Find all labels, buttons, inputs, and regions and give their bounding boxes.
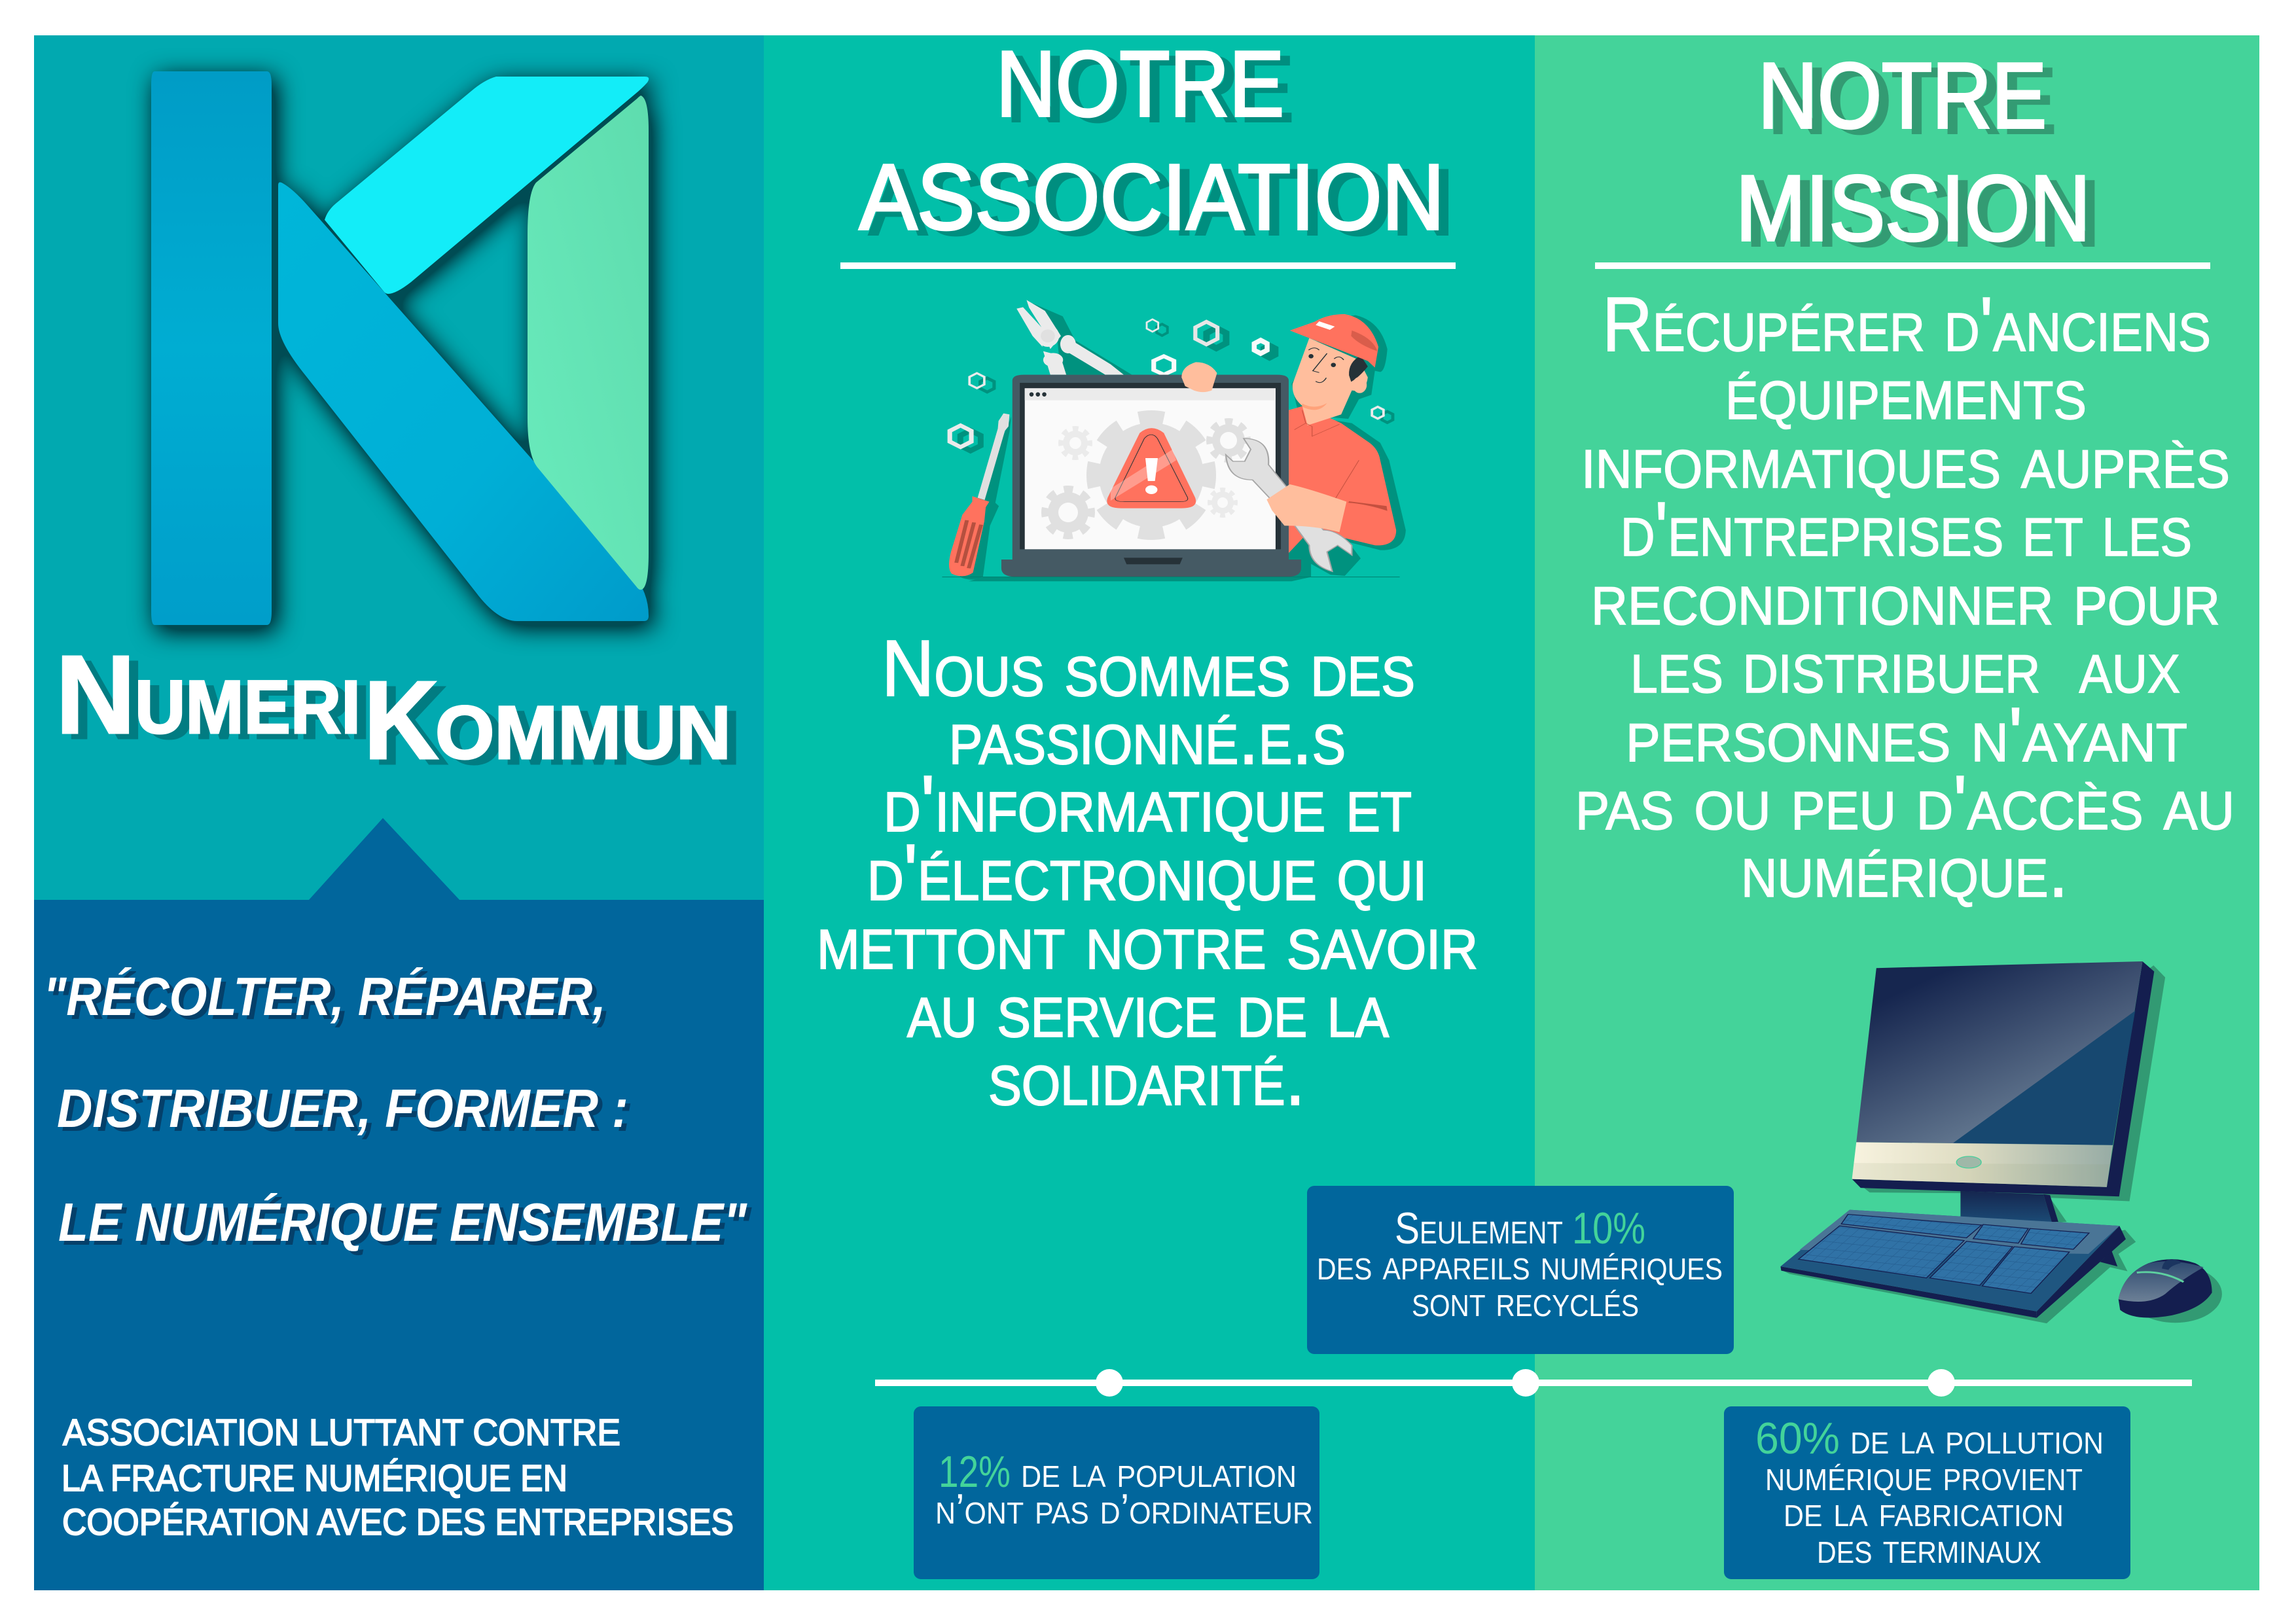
timeline (875, 1369, 2192, 1397)
brand name: OMMUN (435, 691, 731, 775)
illustration: desktop computer (1780, 961, 2222, 1323)
association paragraph: Nous sommes des (882, 624, 1415, 713)
association description: ASSOCIATION LUTTANT CONTRE (63, 1412, 620, 1454)
icon: sleeve cuff (1348, 501, 1388, 511)
icon: warning triangle (1107, 428, 1196, 508)
icon: laptop base (942, 558, 1400, 577)
callout: 60% of digital pollution (1724, 1406, 2130, 1579)
monitor (1852, 961, 2154, 1196)
logo: green panel (528, 96, 649, 590)
heading: notre association (859, 32, 1444, 249)
association description (62, 1412, 734, 1543)
mission paragraph: équipements (1725, 349, 2087, 436)
association paragraph: au service de la (907, 965, 1389, 1054)
panel: slogan block with pointer (34, 818, 764, 1590)
callout: 60% of digital pollution: 60% (1755, 1414, 1840, 1463)
keyboard (1780, 1210, 2126, 1318)
callout: 12% without a computer: n’ont pas d’ordinateur (935, 1485, 1313, 1533)
icon: man's body (1289, 406, 1396, 553)
icon: laptop lid (1013, 375, 1289, 560)
logo: cyan upper arm (325, 77, 649, 294)
callout: 10% recycled: des appareils numériques (1317, 1241, 1723, 1289)
mission paragraph: personnes n'ayant (1626, 692, 2187, 778)
brand name: K (364, 658, 439, 783)
icon: hand holding wrench (1266, 484, 1346, 532)
mission paragraph: d'entreprises et les (1621, 486, 2192, 573)
callout: 10% recycled: sont recyclés (1412, 1277, 1639, 1325)
heading: notre mission (1736, 44, 2090, 260)
slogan: "RÉCOLTER, RÉPARER, (43, 966, 606, 1027)
brand name: N (56, 633, 135, 757)
mouse (2119, 1259, 2212, 1317)
association paragraph: passionné.e.s (949, 692, 1346, 781)
brand name (56, 633, 731, 783)
callout: 60% of digital pollution: des terminaux (1817, 1524, 2041, 1572)
association paragraph (817, 624, 1478, 1122)
mission paragraph: numérique. (1741, 827, 2068, 914)
association paragraph: d'électronique qui (867, 828, 1427, 917)
association description: COOPÉRATION AVEC DES ENTREPRISES (62, 1501, 734, 1543)
callout: 12% without a computer (914, 1406, 1319, 1579)
heading: notre association: ASSOCIATION (859, 145, 1444, 249)
heading: notre mission: NOTRE (1758, 44, 2047, 148)
logo: K mark (151, 71, 649, 625)
logo: vertical bar (151, 71, 272, 625)
callout: 12% without a computer: de la population (1021, 1448, 1297, 1496)
computer shadows (1781, 965, 2222, 1323)
monitor stand (1960, 1191, 2058, 1222)
icon: nuts (948, 318, 1394, 454)
mission paragraph: les distribuer aux (1630, 623, 2180, 709)
heading: notre association: NOTRE (996, 32, 1284, 136)
panel: association column (764, 35, 1535, 1590)
mission paragraph: informatiques auprès (1581, 418, 2230, 505)
slogan: LE NUMÉRIQUE ENSEMBLE" (58, 1192, 747, 1253)
slogan: DISTRIBUER, FORMER : (57, 1078, 628, 1139)
illustration shadows (960, 303, 1406, 581)
icon: wrench (1226, 438, 1352, 571)
callout: 10% recycled: 10% (1572, 1204, 1645, 1253)
mission paragraph (1575, 281, 2234, 914)
icon: man's head and hat (1290, 314, 1378, 499)
callout: 60% of digital pollution: numérique provient (1765, 1452, 2083, 1499)
logo: diagonal stroke (278, 183, 649, 621)
slogan (43, 966, 747, 1253)
panel: mission column (1535, 35, 2259, 1590)
heading underline: mission (1595, 262, 2210, 269)
panel: logo background (34, 35, 764, 900)
icon: pliers (1016, 300, 1124, 375)
callout: 10% recycled: Seulement (1395, 1204, 1563, 1253)
illustration: technician repairing a laptop (942, 300, 1406, 581)
icon: hand on the laptop lid (1181, 362, 1217, 392)
association paragraph: solidarité. (988, 1033, 1305, 1122)
mission paragraph: pas ou peu d'accès au (1575, 760, 2234, 846)
callout: 60% of digital pollution: de la fabrication (1784, 1488, 2064, 1535)
callout: 10% recycled (1307, 1186, 1734, 1354)
association description: LA FRACTURE NUMÉRIQUE EN (62, 1457, 567, 1499)
association paragraph: mettont notre savoir (817, 897, 1478, 986)
callout: 60% of digital pollution: de la pollution (1850, 1415, 2104, 1463)
mission paragraph: Récupérer d'anciens (1602, 281, 2211, 368)
brand name: UMERI (135, 666, 361, 749)
icon: gears on screen (1045, 418, 1247, 535)
heading underline: association (840, 262, 1456, 269)
mission paragraph: reconditionner pour (1591, 555, 2220, 641)
heading: notre mission: MISSION (1736, 156, 2090, 260)
icon: screwdriver (949, 414, 1009, 576)
callout: 12% without a computer: 12% (939, 1447, 1011, 1497)
association paragraph: d'informatique et (884, 759, 1412, 848)
